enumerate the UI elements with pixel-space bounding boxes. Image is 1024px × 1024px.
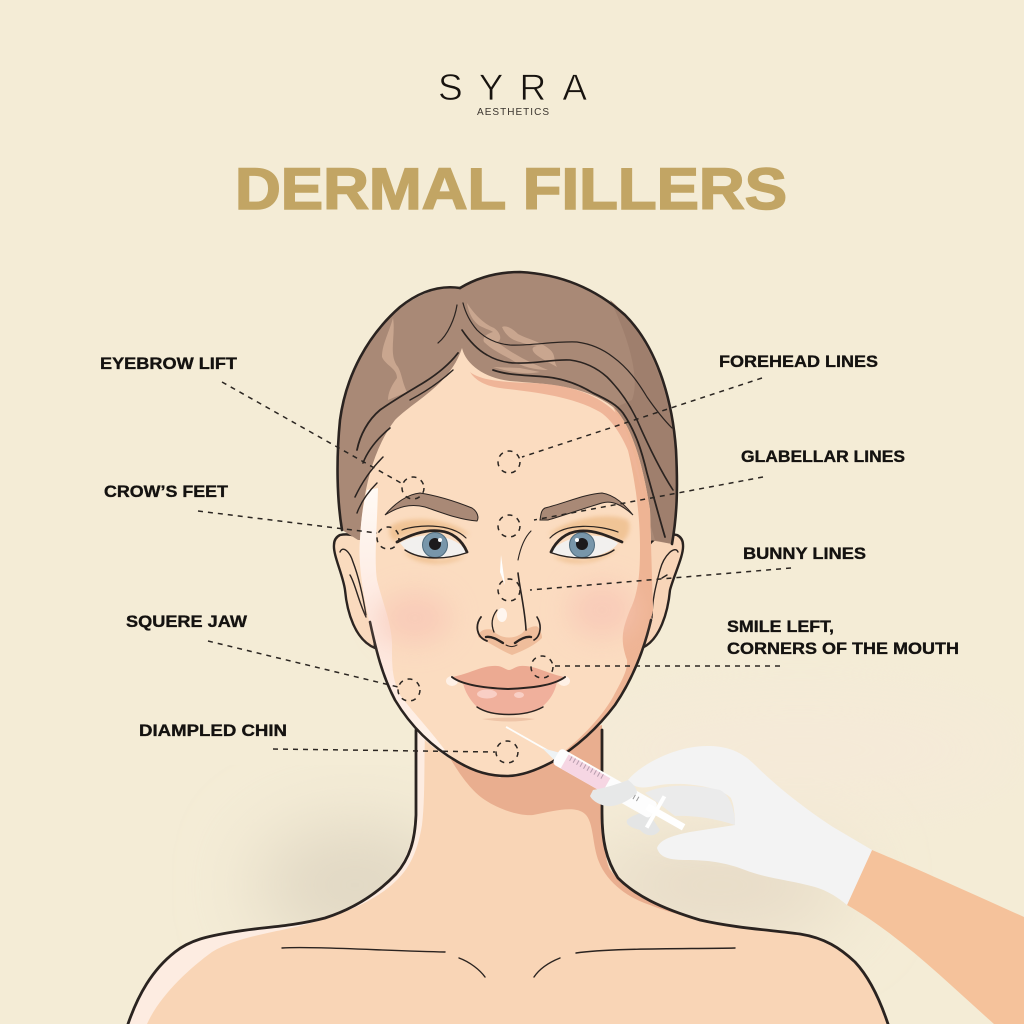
head outline: [128, 272, 888, 1024]
hair: [338, 272, 677, 544]
label: bunny lines: [498, 545, 866, 601]
glove back: [628, 746, 872, 905]
eye right: [550, 526, 622, 558]
eyebrow left: [385, 493, 478, 521]
neck shadow: [447, 725, 690, 917]
ear right: [642, 534, 683, 648]
syringe: [497, 711, 692, 843]
label: squere jaw: SQUERE JAW: [126, 613, 247, 631]
neck and shoulders: [128, 725, 888, 1024]
label: smile left: [531, 618, 959, 678]
label: diampled chin: [139, 722, 518, 763]
nose: [477, 531, 542, 655]
ear details: [340, 549, 678, 618]
eyebrow right: [540, 493, 633, 520]
label: glabellar lines: [498, 448, 905, 537]
label: crow's feet: [104, 483, 399, 549]
glove palm shade: [645, 786, 735, 825]
background shadows: [255, 690, 1024, 945]
label: forehead lines: FOREHEAD LINES: [719, 353, 878, 371]
blush: [379, 582, 636, 644]
hair strands: [355, 303, 673, 537]
label: eyebrow lift: EYEBROW LIFT: [100, 355, 237, 373]
label: crow's feet: CROW’S FEET: [104, 483, 228, 501]
hair highlights: [382, 303, 557, 400]
glove fingertip: [590, 780, 637, 806]
label: smile left: SMILE LEFT,: [727, 618, 834, 636]
label: smile left: CORNERS OF THE MOUTH: [727, 640, 959, 658]
neck highlight: [128, 730, 425, 1024]
face highlight left: [359, 488, 452, 760]
hair side shade: [610, 300, 677, 544]
illustration: woman: [128, 272, 888, 1024]
lips: [446, 666, 570, 722]
face right shade: [545, 407, 653, 766]
label: glabellar lines: GLABELLAR LINES: [741, 448, 905, 466]
collarbones: [282, 948, 735, 977]
eye left: [397, 526, 468, 558]
arm: [847, 850, 1024, 1024]
needle: [506, 726, 555, 755]
face: [360, 348, 653, 776]
label: squere jaw: [126, 613, 420, 701]
label: eyebrow lift: [100, 355, 424, 499]
ear left: [334, 534, 375, 648]
label: bunny lines: BUNNY LINES: [743, 545, 866, 563]
logo: SYRA: [438, 67, 587, 108]
glove lower fingers: [627, 813, 660, 835]
eyeshadow: [389, 516, 630, 564]
barrel: [552, 748, 658, 819]
logo: AESTHETICS: [477, 107, 549, 118]
label: diampled chin: DIAMPLED CHIN: [139, 722, 287, 740]
title: DERMAL FILLERS: [235, 157, 787, 222]
plunger: [645, 804, 685, 830]
forehead shade: [470, 372, 645, 505]
label: forehead lines: [498, 353, 878, 473]
